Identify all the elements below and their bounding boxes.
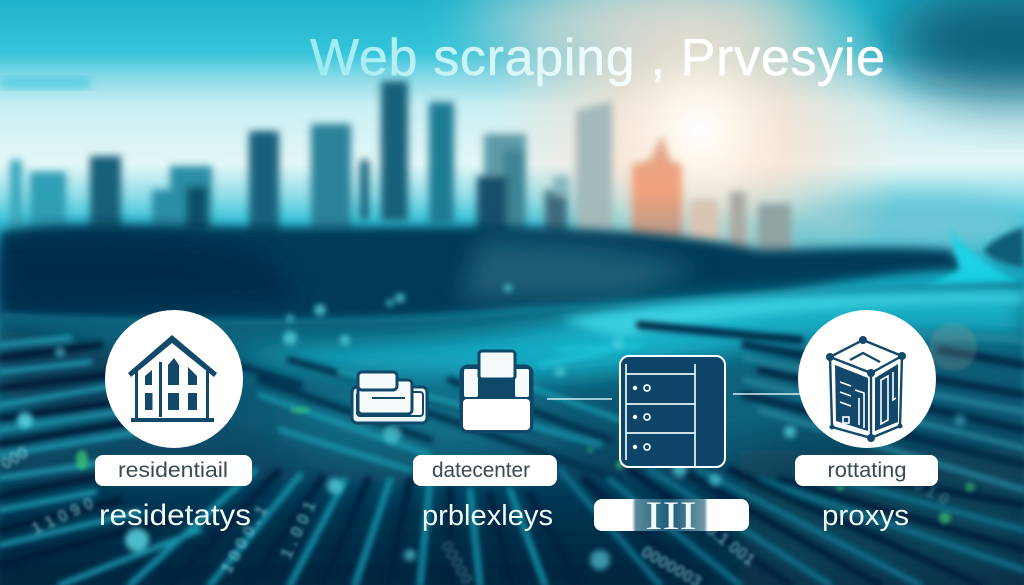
residential house icon — [105, 310, 243, 448]
rotating label pill — [795, 455, 938, 486]
residetatys caption: residetatys — [99, 499, 251, 532]
circuit network ground — [0, 282, 1024, 585]
proxys caption: proxys — [822, 500, 909, 532]
circuit network ground: 1 . 0 0 1 — [276, 498, 320, 562]
circuit network ground: 1 0 0 0 . 1 — [217, 502, 271, 577]
title: Web scraping , Prvesyie — [310, 29, 885, 87]
rotating label pill: rottating — [828, 459, 906, 482]
residential label pill — [95, 455, 252, 486]
printer stack icon — [352, 372, 427, 423]
connector lines — [547, 394, 800, 399]
server rack icon — [620, 356, 725, 467]
city skyline — [10, 81, 791, 254]
prblexleys caption: prblexleys — [422, 500, 553, 532]
barcode pill — [594, 493, 749, 538]
datacenter label pill — [413, 455, 557, 486]
dark land mass — [0, 225, 1024, 321]
circuit network ground: 000.1 001 — [688, 508, 759, 570]
printer tower icon — [461, 351, 532, 432]
circuit network ground: 1 1 0 9 0 — [29, 493, 97, 539]
datacenter label pill: datecenter — [432, 459, 530, 482]
barcode pill: III — [645, 493, 697, 538]
rotating proxy icon — [798, 310, 936, 448]
residential label pill: residentiail — [118, 459, 228, 482]
circuit network ground: 0 0 1 0 — [898, 467, 953, 509]
